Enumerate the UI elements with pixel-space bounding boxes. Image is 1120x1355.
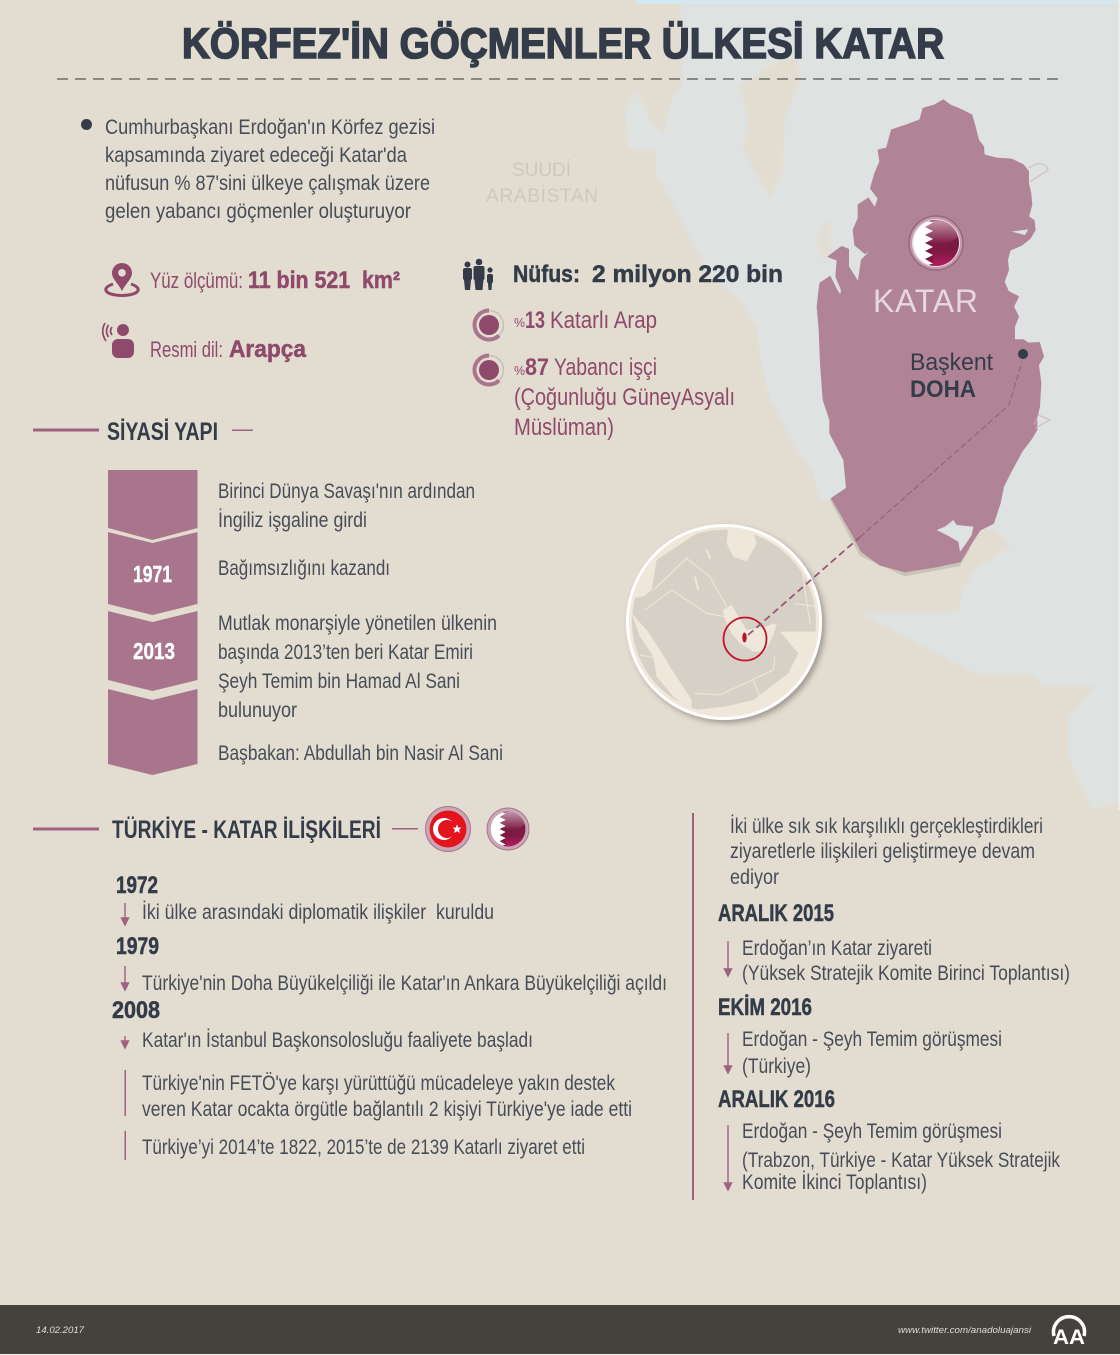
arrow Aralik 2015 xyxy=(724,941,732,976)
arrow Aralik 2016 xyxy=(724,1125,732,1190)
timeline arrows: 1971 xyxy=(133,561,172,587)
icon: ring 87 xyxy=(474,356,504,385)
label: capital Doha: DOHA xyxy=(910,376,976,403)
language stat: Arapça xyxy=(229,336,307,363)
stat: 13 percent: % xyxy=(514,315,525,330)
area stat: 11 bin 521 km² xyxy=(248,267,400,294)
relations timeline right: (Türkiye) xyxy=(742,1054,811,1078)
icon: flag of Turkey xyxy=(426,806,470,852)
relations timeline right: İki ülke sık sık karşılıklı gerçekleştirdikleri xyxy=(730,814,1043,838)
intro text block: kapsamında ziyaret edeceği Katar'da xyxy=(105,143,407,167)
population stat: Nüfus: xyxy=(513,261,580,288)
sea map xyxy=(625,0,1120,810)
political text: bulunuyor xyxy=(218,698,297,722)
stat: 87 percent xyxy=(474,354,735,441)
timeline arrows xyxy=(108,470,198,775)
political text: Bağımsızlığını kazandı xyxy=(218,556,390,580)
political text: başında 2013’ten beri Katar Emiri xyxy=(218,640,473,664)
label: Katar: KATAR xyxy=(873,283,978,319)
icon: ring 13 xyxy=(474,310,504,340)
relations timeline left: Türkiye’yi 2014’te 1822, 2015’te de 2139 Katarlı ziyaret etti xyxy=(142,1135,585,1159)
political text: Birinci Dünya Savaşı'nın ardından xyxy=(218,479,475,503)
political text: Şeyh Temim bin Hamad Al Sani xyxy=(218,669,460,693)
heading: political structure xyxy=(33,418,253,446)
relations timeline left: veren Katar ocakta örgütle bağlantılı 2 kişiyi Türkiye'ye iade etti xyxy=(142,1097,632,1121)
language stat xyxy=(103,323,307,363)
relations timeline right: Erdoğan’ın Katar ziyareti xyxy=(742,936,932,960)
relations timeline left: İki ülke arasındaki diplomatik ilişkiler kuruldu xyxy=(142,900,494,924)
arrow 2008 xyxy=(122,1036,128,1048)
arrow 1979 xyxy=(122,966,128,990)
heading: Turkey-Qatar relations xyxy=(33,806,529,852)
icon: AA logo: AA xyxy=(1053,1326,1085,1349)
stat: 13 percent xyxy=(474,307,657,340)
footer xyxy=(0,1305,1120,1355)
stat: 87 percent: Müslüman) xyxy=(514,414,614,441)
relations timeline left xyxy=(112,872,667,1160)
population stat: 2 milyon 220 bin xyxy=(592,261,783,288)
icon: Qatar marker xyxy=(742,632,747,642)
heading: political structure: SİYASİ YAPI xyxy=(107,418,218,446)
intro text block: nüfusun % 87'sini ülkeye çalışmak üzere xyxy=(105,171,430,195)
intro text block xyxy=(81,115,435,223)
date Aralik 2015: ARALIK 2015 xyxy=(718,900,834,927)
stat: 13 percent: 13 xyxy=(525,307,545,334)
date Aralik 2016: ARALIK 2016 xyxy=(718,1086,835,1113)
title: KÖRFEZ'İN GÖÇMENLER ÜLKESİ KATAR xyxy=(182,20,944,68)
year 2008: 2008 xyxy=(112,997,160,1024)
year 1979: 1979 xyxy=(116,933,159,960)
date Ekim 2016: EKİM 2016 xyxy=(718,994,812,1021)
political text xyxy=(218,479,503,765)
political text: İngiliz işgaline girdi xyxy=(218,508,367,532)
arrow 1972 xyxy=(122,903,128,925)
map label: Saudi Arabia: ARABİSTAN xyxy=(486,186,598,207)
year 1972: 1972 xyxy=(116,872,158,899)
red locator circle xyxy=(724,618,766,660)
heading: Turkey-Qatar relations: TÜRKİYE - KATAR İLİŞKİLERİ xyxy=(112,815,381,844)
icon: people xyxy=(463,259,493,290)
stat: 87 percent: Yabancı işçi xyxy=(554,354,657,381)
area stat: Yüz ölçümü: xyxy=(150,268,243,293)
map: Qatar xyxy=(817,100,1050,574)
political text: Başbakan: Abdullah bin Nasir Al Sani xyxy=(218,741,503,765)
relations timeline right: ediyor xyxy=(730,865,779,889)
footer url: www.twitter.com/anadoluajansi xyxy=(898,1325,1032,1336)
intro text block: gelen yabancı göçmenler oluşturuyor xyxy=(105,199,411,223)
label: capital Doha xyxy=(910,349,993,403)
label: capital Doha: Başkent xyxy=(910,349,993,376)
relations timeline left: Katar'ın İstanbul Başkonsolosluğu faaliyete başladı xyxy=(142,1028,533,1052)
locator globe xyxy=(623,523,860,723)
dashed leader line xyxy=(748,537,860,635)
stat: 13 percent: Katarlı Arap xyxy=(550,307,657,334)
stat: 87 percent: (Çoğunluğu GüneyAsyalı xyxy=(514,384,735,411)
language stat: Resmi dil: xyxy=(150,337,223,362)
icon: location pin xyxy=(106,263,138,296)
icon: AA logo xyxy=(1053,1317,1085,1349)
map label: Saudi Arabia: SUUDİ xyxy=(512,160,571,181)
footer date: 14.02.2017 xyxy=(36,1325,85,1336)
relations timeline right: Erdoğan - Şeyh Temim görüşmesi xyxy=(742,1119,1002,1143)
icon: flag of Qatar xyxy=(909,216,963,270)
capital leader line xyxy=(860,349,1028,537)
area stat xyxy=(106,263,400,296)
relations timeline right: Komite İkinci Toplantısı) xyxy=(742,1170,927,1194)
arrow Ekim 2016 xyxy=(724,1033,732,1073)
map label: Saudi Arabia xyxy=(486,160,598,207)
stat: 87 percent: 87 xyxy=(525,354,549,381)
political text: Mutlak monarşiyle yönetilen ülkenin xyxy=(218,611,497,635)
relations timeline left: Türkiye'nin Doha Büyükelçiliği ile Katar'ın Ankara Büyükelçiliği açıldı xyxy=(142,971,667,995)
relations timeline right xyxy=(692,813,1070,1200)
relations timeline right: ziyaretlerle ilişkileri geliştirmeye devam xyxy=(730,839,1035,863)
intro text block: Cumhurbaşkanı Erdoğan'ın Körfez gezisi xyxy=(105,115,435,139)
timeline arrows: 2013 xyxy=(133,638,175,664)
population stat xyxy=(463,259,783,290)
relations timeline left: Türkiye'nin FETÖ'ye karşı yürüttüğü mücadeleye yakın destek xyxy=(142,1071,615,1095)
stat: 87 percent: % xyxy=(514,363,525,378)
icon: flag of Qatar small xyxy=(487,808,529,850)
icon: speaking person xyxy=(103,323,134,358)
relations timeline right: Erdoğan - Şeyh Temim görüşmesi xyxy=(742,1027,1002,1051)
